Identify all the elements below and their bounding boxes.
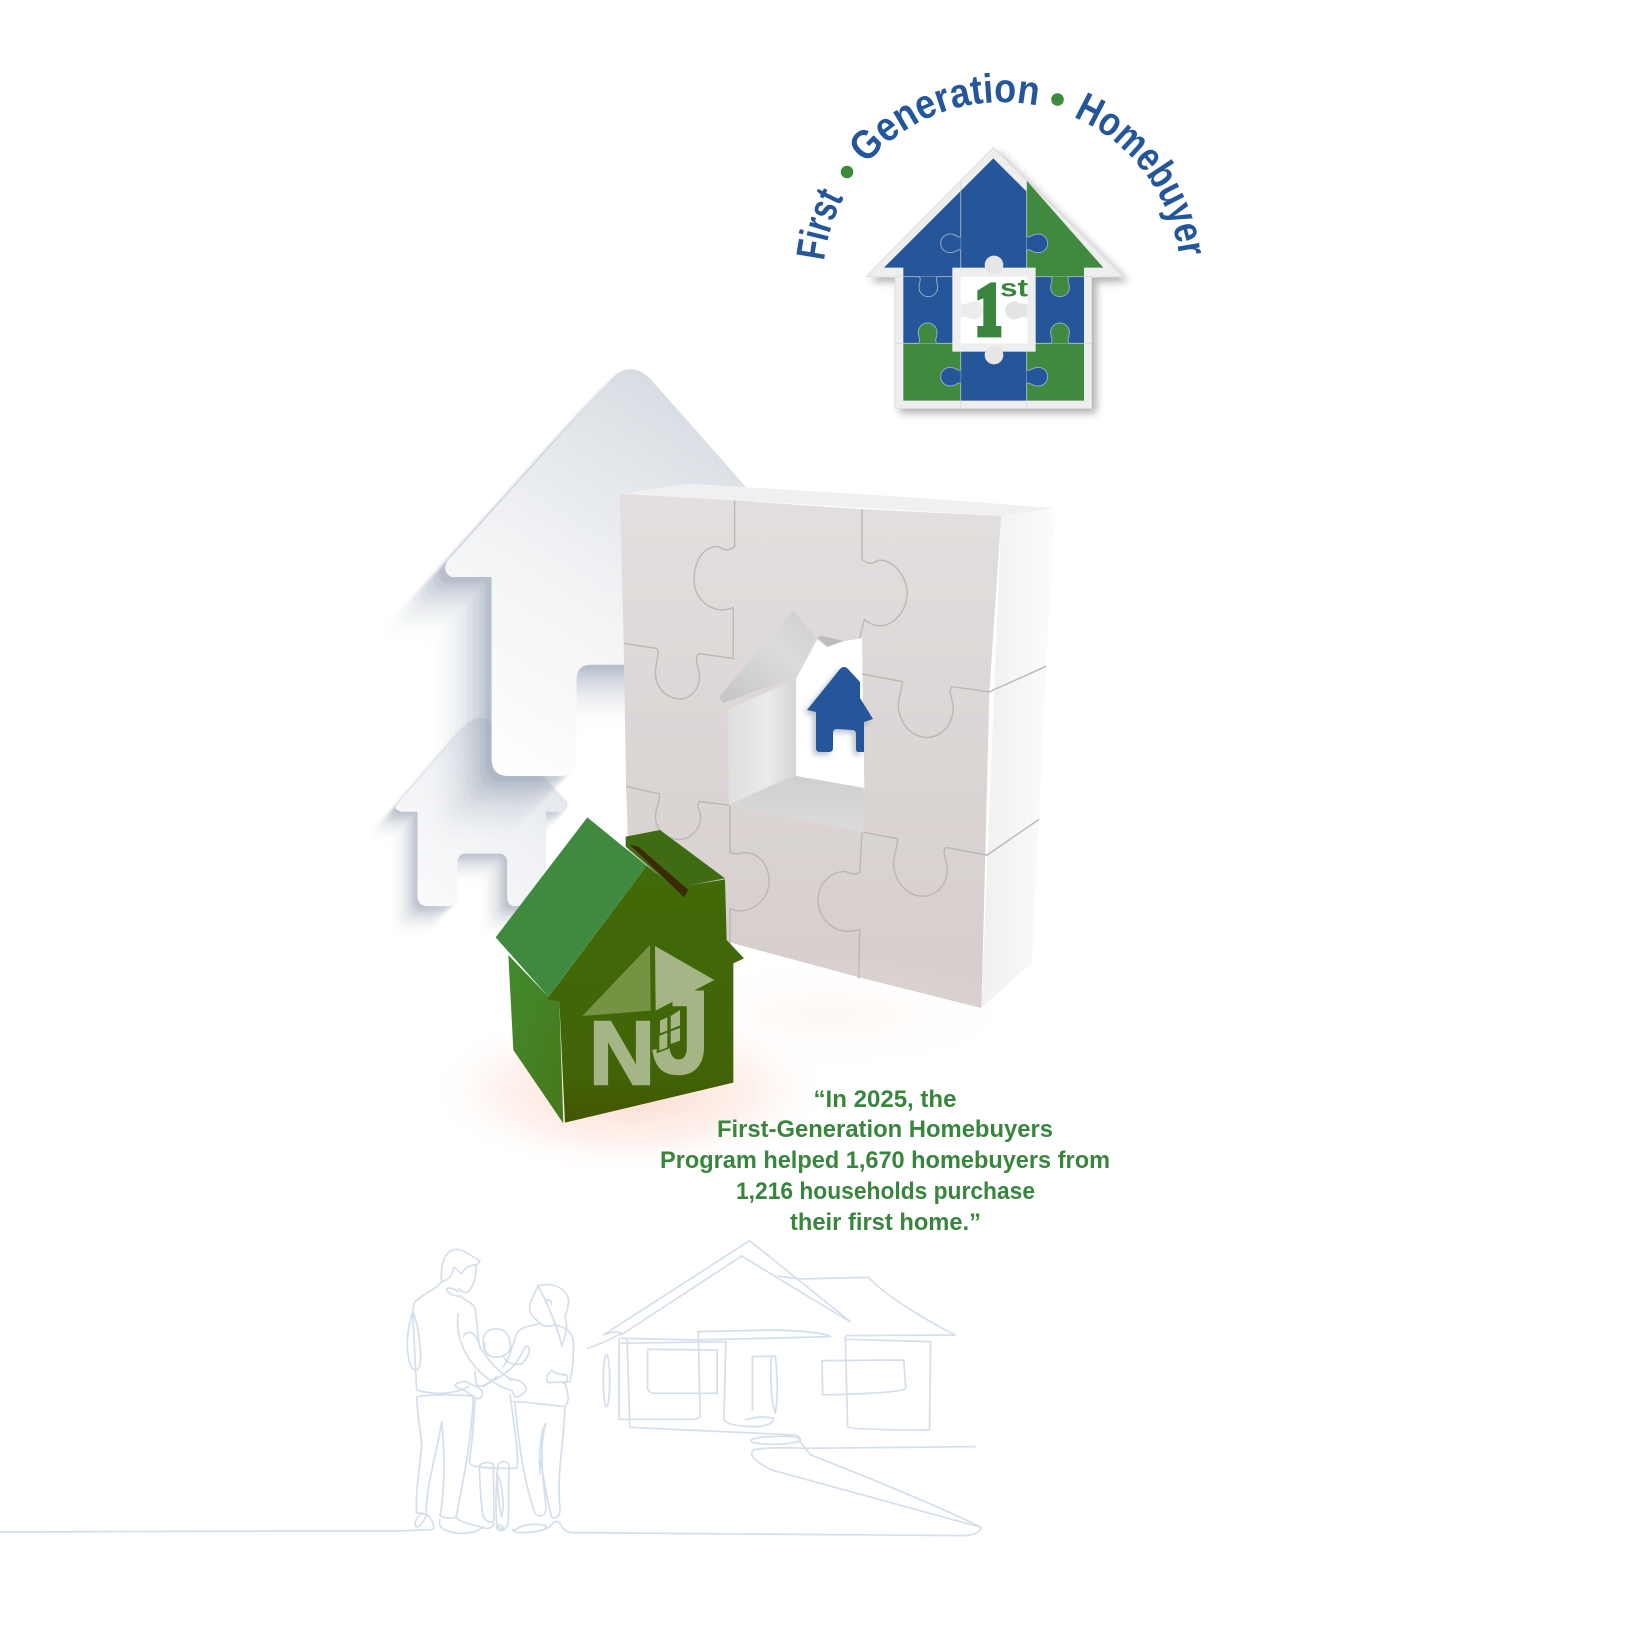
small house long shadow <box>369 721 564 935</box>
logo arc heading: First Generation Homebuyer: Homebuyer <box>1075 92 1201 254</box>
block front face <box>620 494 1001 1008</box>
coin slot <box>630 845 688 897</box>
logo blue pieces <box>884 158 1084 401</box>
puzzle block wall <box>620 484 1055 1008</box>
quote text: Program helped 1,670 homebuyers from <box>660 1147 1110 1174</box>
house front wall <box>547 866 744 1123</box>
ground glow <box>425 1005 835 1175</box>
logo arc heading: First Generation Homebuyer <box>796 72 1201 259</box>
quote text: their first home.” <box>790 1209 981 1236</box>
logo centre window <box>952 256 1036 364</box>
quote text: First-Generation Homebuyers <box>717 1116 1053 1143</box>
NJ logo roof right <box>655 946 714 1011</box>
small house body <box>396 717 568 906</box>
NJ logo letters: N <box>589 1004 655 1104</box>
ground line left <box>0 1531 400 1532</box>
logo green upper piece <box>1027 181 1103 277</box>
line art: family and house <box>0 1241 981 1536</box>
child <box>455 1329 529 1531</box>
opening small roof piece <box>817 636 843 647</box>
opening left wall <box>728 679 796 805</box>
logo: puzzle house <box>866 147 1123 408</box>
block right side <box>981 508 1055 1008</box>
logo 1st mark <box>977 275 1029 337</box>
puzzle ground glow <box>620 955 1040 1075</box>
opening <box>796 638 864 789</box>
opening floor <box>730 776 863 832</box>
house left ellipse <box>603 1355 610 1407</box>
block top face <box>620 484 1055 516</box>
large house body <box>445 369 756 776</box>
large house long shadow <box>384 375 750 840</box>
house left wall <box>508 955 563 1123</box>
large ghost house <box>384 369 756 840</box>
puzzle seams <box>624 501 1046 979</box>
woman <box>503 1284 574 1533</box>
quote text: 1,216 households purchase <box>736 1178 1035 1205</box>
logo 1st mark: st <box>1000 275 1029 303</box>
logo arc heading: First Generation Homebuyer: Generation <box>852 72 1038 158</box>
logo frame <box>866 147 1123 408</box>
logo green pieces <box>903 343 1084 401</box>
house back roof <box>626 830 725 898</box>
logo knobs <box>918 234 1069 386</box>
logo seams <box>895 181 1092 408</box>
house drawing <box>526 1241 981 1536</box>
NJ logo roof left <box>582 945 651 1016</box>
opening roof wedge <box>719 610 816 703</box>
NJ logo letters <box>589 967 710 1104</box>
small blue house <box>807 667 873 752</box>
quote text: “In 2025, the <box>814 1086 956 1113</box>
green piggy-bank house <box>496 817 744 1123</box>
house front roof <box>496 817 647 997</box>
NJ logo window <box>657 1007 682 1053</box>
family <box>400 1249 574 1533</box>
small ghost house <box>369 717 568 935</box>
NJ logo letters: J <box>652 967 710 1099</box>
quote text <box>660 1086 1110 1236</box>
logo arc heading: First Generation Homebuyer: First <box>796 188 844 259</box>
man <box>400 1249 513 1533</box>
